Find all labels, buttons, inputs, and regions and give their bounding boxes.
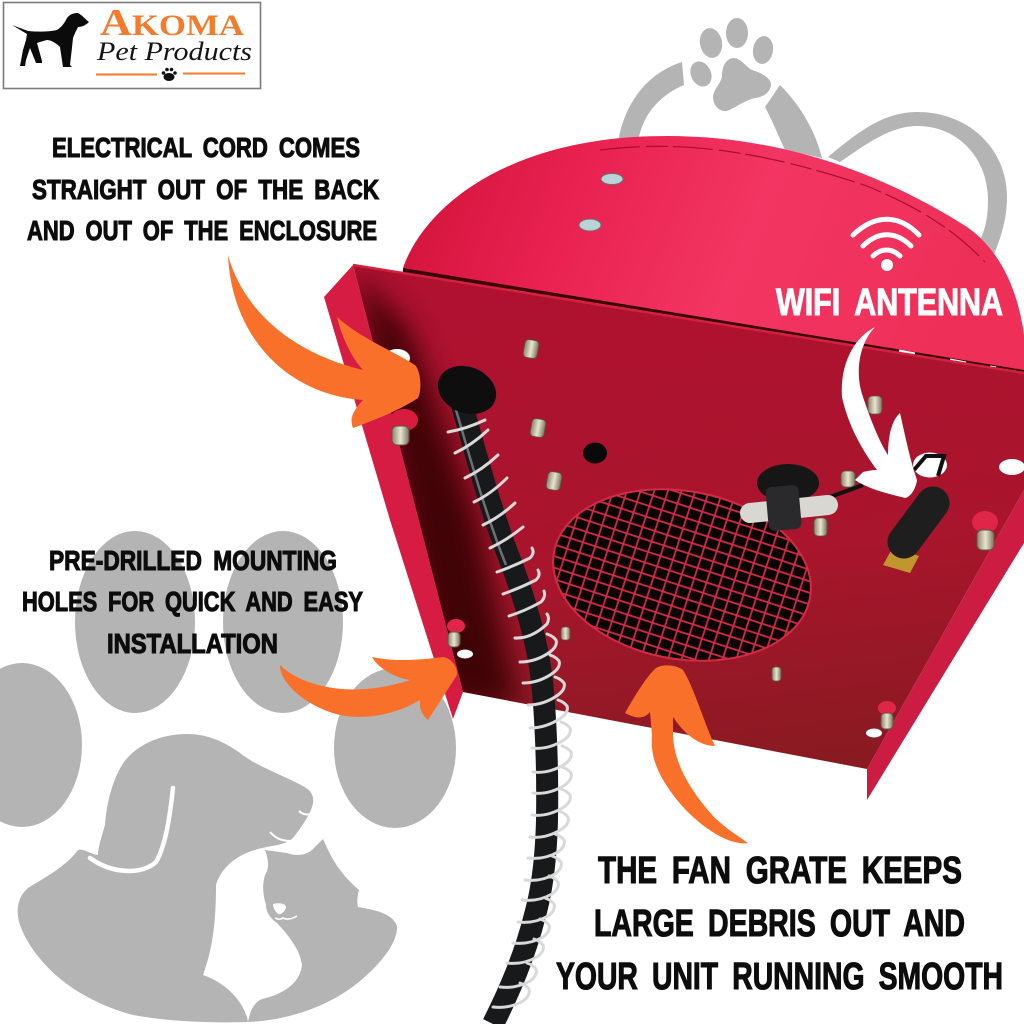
red fan unit — [324, 136, 1024, 800]
text: mounting holes — [22, 545, 363, 659]
logo rules — [96, 74, 245, 75]
dark seam — [403, 270, 1024, 372]
top right ring and paw watermark — [618, 18, 1007, 257]
left plate shadow — [355, 270, 520, 710]
right ring arc — [765, 85, 822, 158]
text: mounting holes: HOLES FOR QUICK AND EASY — [22, 586, 363, 617]
threaded studs — [523, 339, 882, 681]
infinity loop — [828, 112, 1007, 257]
red capped standoffs — [390, 409, 998, 729]
text: mounting holes: INSTALLATION — [107, 628, 278, 659]
text: electrical cord: AND OUT OF THE ENCLOSURE — [27, 215, 377, 246]
left flange — [324, 265, 463, 719]
cat nose — [273, 903, 286, 914]
dog ear line — [90, 788, 173, 871]
cord highlight — [456, 410, 506, 565]
fan grate — [539, 470, 825, 680]
logo name: AKOMA — [100, 2, 244, 44]
electrical cord with spring — [431, 357, 571, 1024]
cat mouth — [275, 916, 297, 919]
logo box — [4, 2, 260, 88]
logo small paw — [162, 68, 177, 81]
white arrow to antenna — [842, 327, 917, 498]
dome top — [403, 136, 1024, 378]
background paw watermark — [0, 531, 456, 1022]
grommet — [431, 357, 503, 423]
cat silhouette — [248, 839, 397, 1022]
text: fan grate — [556, 850, 1003, 998]
plate holes — [384, 349, 1024, 738]
back plate — [353, 265, 1024, 769]
orange arrow to fan grate — [625, 665, 748, 843]
orange arrow to mounting hole — [280, 657, 457, 720]
right flange — [867, 490, 1024, 800]
logo frame — [4, 2, 260, 88]
dog silhouette — [18, 734, 313, 1022]
text: electrical cord: STRAIGHT OUT OF THE BACK — [32, 174, 379, 205]
logo tagline: Pet Products — [96, 37, 252, 66]
wifi icon — [853, 219, 919, 268]
text: mounting holes: PRE-DRILLED MOUNTING — [49, 545, 337, 576]
seam notches — [899, 351, 996, 368]
orange arrow to cord — [228, 255, 420, 428]
text: electrical cord: ELECTRICAL CORD COMES — [52, 132, 360, 163]
power connector — [750, 464, 863, 531]
cord — [462, 405, 547, 1024]
plate top highlight edge — [353, 265, 1024, 373]
wifi antenna device — [883, 503, 933, 573]
dome rim line — [600, 146, 985, 262]
dog mouth lines — [270, 811, 311, 841]
text: electrical cord — [27, 132, 379, 246]
logo dog — [12, 13, 89, 67]
left ring arc — [618, 62, 684, 142]
dome screws — [579, 174, 623, 231]
spring coils — [448, 420, 571, 1007]
paw print — [686, 18, 775, 111]
paw toes — [0, 531, 456, 828]
